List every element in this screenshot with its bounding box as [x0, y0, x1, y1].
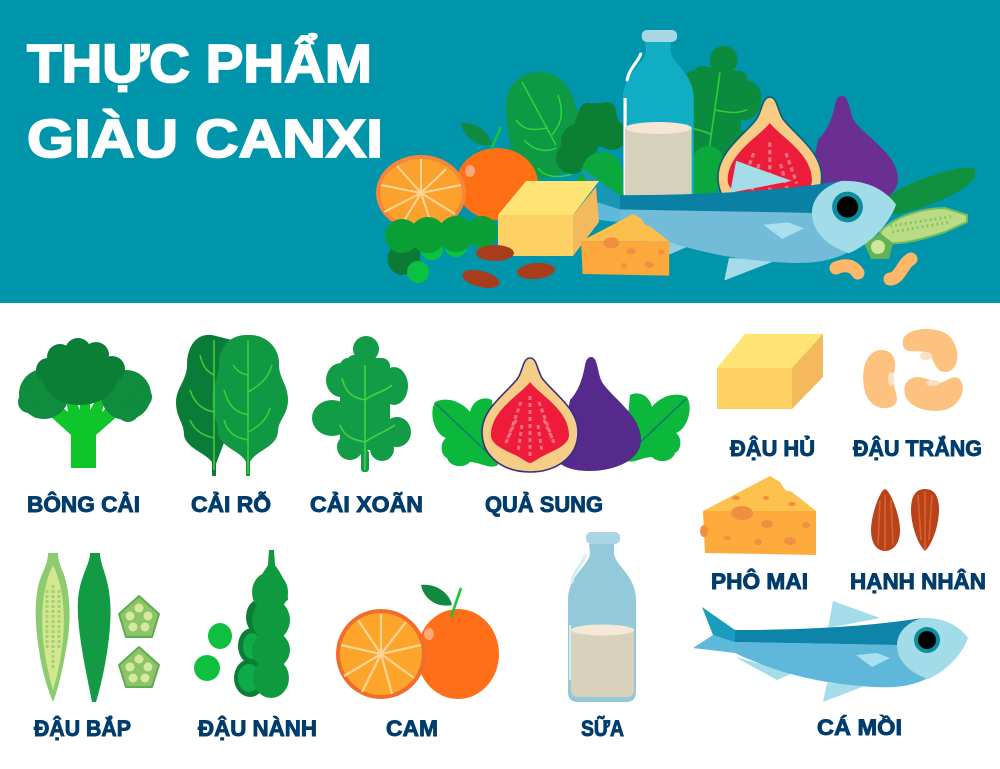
title: GIÀU CANXI: [27, 109, 383, 169]
header spinach: [506, 72, 584, 178]
header broccoli: [556, 102, 627, 174]
header orange slice: [376, 155, 466, 231]
orange slice: [336, 609, 426, 699]
icon: fish: [693, 601, 968, 702]
title: [27, 34, 383, 169]
label: CẢI RỖ: [191, 491, 271, 517]
label: ĐẬU TRẮNG: [853, 436, 982, 461]
milk item: [568, 532, 636, 741]
label: SỮA: [581, 716, 624, 741]
icon: okra: [36, 553, 159, 702]
label: ĐẬU BẮP: [34, 716, 131, 741]
label: ĐẬU NÀNH: [198, 716, 317, 741]
cut okra: [36, 553, 70, 702]
almond item: [850, 489, 986, 594]
whole okra: [78, 553, 111, 702]
cut fig: [482, 358, 578, 472]
title: THỰC PHẨM: [27, 34, 372, 94]
kale item: [310, 336, 423, 517]
icon: spinach: [176, 335, 288, 476]
tofu item: [717, 334, 823, 461]
whole fig: [558, 357, 641, 471]
header fish: [570, 161, 896, 280]
label: CAM: [386, 716, 438, 741]
header soybeans: [385, 216, 498, 283]
header purple fig: [805, 96, 898, 210]
label: QUẢ SUNG: [485, 492, 603, 517]
icon: oranges: [336, 585, 499, 699]
cheese item: [700, 476, 816, 594]
broccoli item: [18, 338, 152, 517]
icon: figs: [432, 357, 690, 472]
icon: soybeans: [194, 550, 290, 698]
label: BÔNG CẢI: [27, 492, 140, 517]
header white beans: [836, 259, 911, 279]
icon: cheese: [700, 476, 816, 555]
header okra: [864, 168, 975, 259]
fig item: [432, 357, 690, 517]
fish item: [693, 601, 968, 740]
header tofu: [498, 181, 599, 256]
spinach item: [176, 335, 288, 517]
label: ĐẬU HỦ: [730, 436, 815, 461]
header milk bottle: [623, 30, 694, 200]
orange item: [336, 585, 499, 741]
icon: white beans: [863, 329, 963, 411]
header cut fig: [718, 97, 822, 220]
header fig leaf: [625, 113, 697, 188]
label: PHÔ MAI: [711, 569, 808, 594]
header orange: [456, 123, 538, 220]
fig leaf right: [624, 393, 690, 462]
okra item: [34, 553, 159, 741]
label: CẢI XOÃN: [310, 492, 423, 517]
icon: kale: [312, 336, 411, 472]
soybean item: [194, 550, 317, 741]
okra slice top: [119, 596, 159, 637]
header illustration: food group: [376, 30, 975, 291]
header cheese: [581, 214, 669, 276]
whole orange: [417, 585, 499, 699]
fig leaf left: [432, 398, 498, 467]
header kale: [654, 39, 771, 186]
label: CÁ MỒI: [817, 715, 902, 740]
okra slice bottom: [119, 647, 159, 687]
icon: milk bottle: [568, 532, 636, 702]
header panel: [0, 0, 1000, 303]
label: HẠNH NHÂN: [850, 569, 986, 594]
header almonds: [461, 245, 556, 291]
icon: tofu: [717, 334, 823, 409]
white beans item: [853, 329, 982, 461]
header parsley: [576, 146, 724, 197]
icon: broccoli: [18, 338, 152, 468]
icon: almonds: [871, 489, 939, 551]
